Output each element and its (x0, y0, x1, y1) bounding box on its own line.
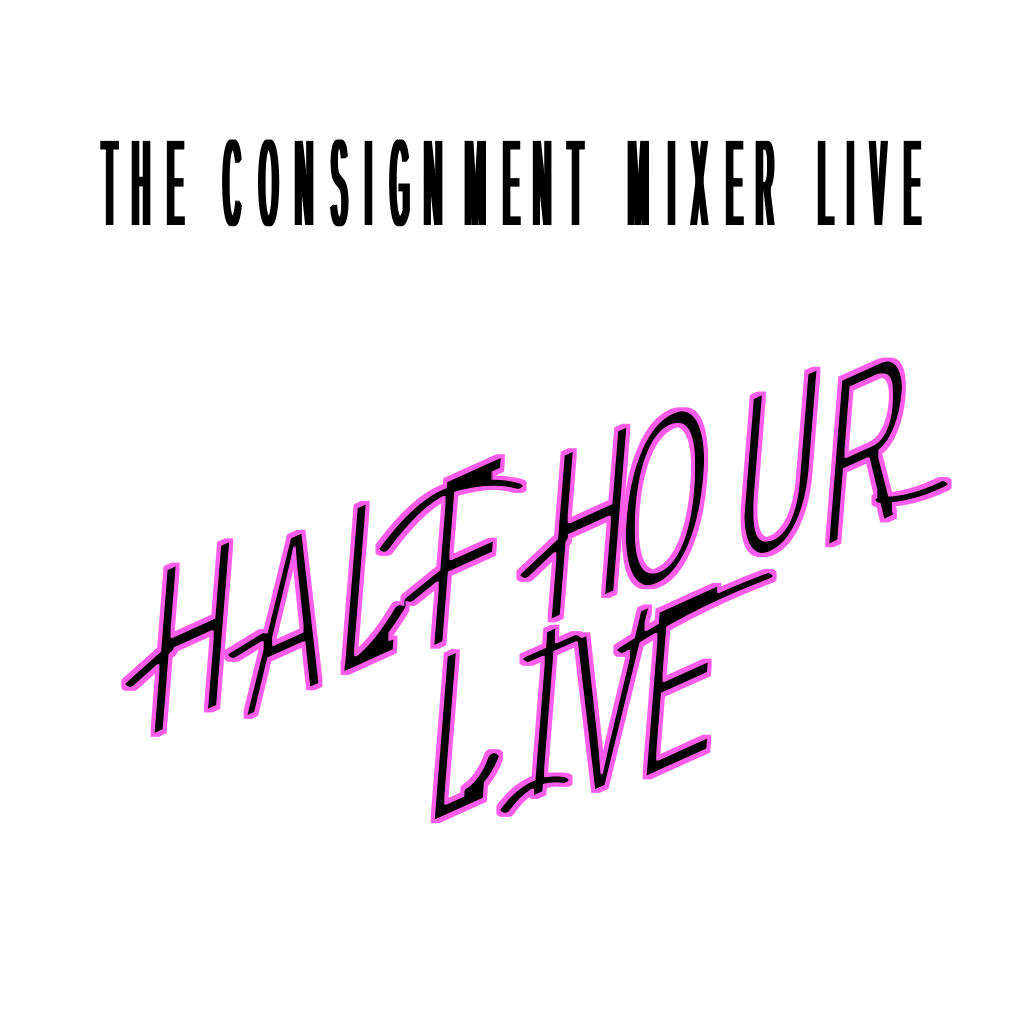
title: The Consignment Mixer Live: THE CONSIGNMENT MIXER LIVE (102, 110, 921, 256)
slanted script heading: Half Hour Live (130, 170, 943, 937)
script line: Live: LIVE (415, 471, 735, 937)
script line: Half Hour: HALF HOUR (130, 170, 929, 916)
swash flourishes on the script letters (130, 483, 943, 810)
